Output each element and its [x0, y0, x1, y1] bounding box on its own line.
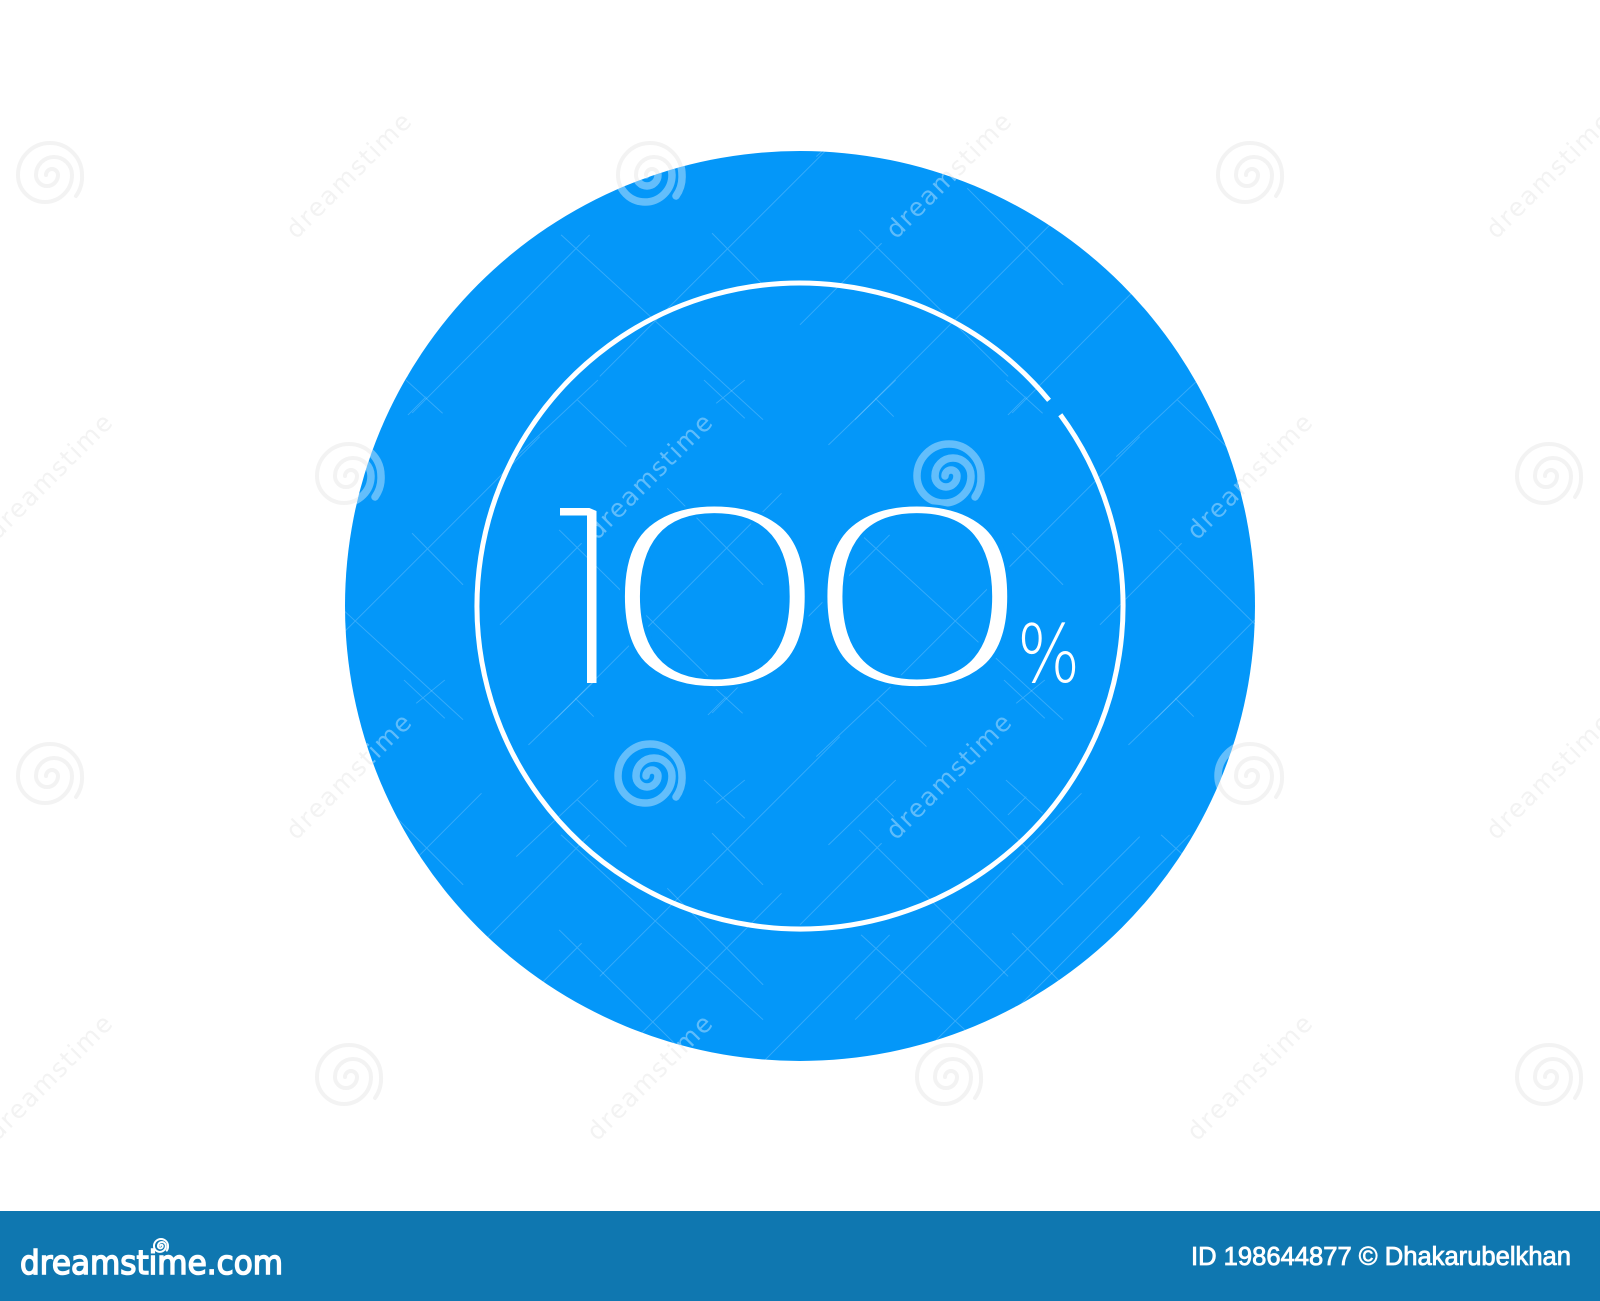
footer bar — [0, 1211, 1600, 1301]
watermark pattern on white: dreamstime — [280, 708, 417, 845]
footer image id and credit: ID 198644877 © Dhakarubelkhan — [1191, 1243, 1571, 1271]
watermark logos on disc — [356, 166, 1240, 1046]
watermark logos on disc: dreamstime — [280, 708, 417, 845]
watermark pattern on white: dreamstime — [280, 107, 417, 244]
watermark logos on disc: dreamstime — [581, 1009, 718, 1146]
footer logo: dreamstime.com — [20, 1243, 283, 1282]
watermark logos on disc: dreamstime — [581, 408, 718, 545]
watermark logos on disc: dreamstime — [1181, 408, 1318, 545]
progress ring with small gap — [348, 154, 1252, 1058]
percentage value: 1 — [508, 424, 670, 787]
watermark lines on disc — [345, 152, 1255, 1060]
watermark logos on disc: dreamstime — [880, 708, 1017, 845]
watermark pattern on white: dreamstime — [1181, 408, 1318, 545]
percentage value: % — [1017, 609, 1080, 702]
watermark pattern on white: dreamstime — [1181, 1009, 1318, 1146]
blue disc — [345, 151, 1255, 1061]
percentage value — [560, 504, 1076, 690]
percentage value: 0 — [789, 460, 1047, 741]
watermark logos on disc: dreamstime — [880, 107, 1017, 244]
watermark pattern on white — [0, 107, 1600, 1146]
watermark pattern on white: dreamstime — [581, 1009, 718, 1146]
percentage value: 0 — [586, 460, 845, 741]
watermark pattern on white: dreamstime — [880, 107, 1017, 244]
